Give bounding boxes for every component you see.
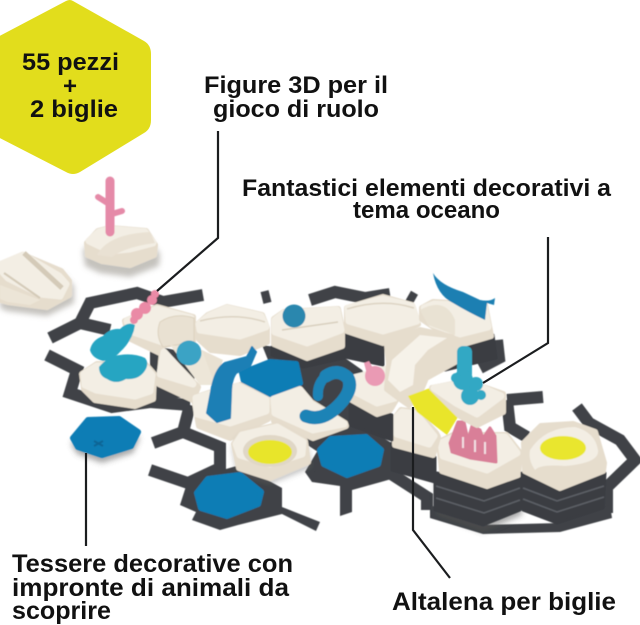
- stacked tile under yellow ramp: [392, 410, 438, 482]
- upper tile stack: centre: [345, 297, 418, 365]
- floating tile with pink coral: [83, 181, 160, 277]
- badge: piece count: +: [63, 73, 77, 100]
- stacked tile with yellow pit: [522, 424, 605, 523]
- heading: 3D figures label line 2: gioco di ruolo: [213, 96, 379, 123]
- tile with yellow circle: [232, 425, 312, 484]
- heading: ocean decorations label: Fantastici elementi decorativi a: [242, 175, 612, 202]
- icon: blue stingray: [433, 273, 495, 320]
- text block: decorative tiles label: scoprire: [12, 597, 111, 625]
- text block: decorative tiles label: Tessere decorative con: [12, 550, 293, 578]
- top middle tile: [198, 307, 267, 353]
- lower tile left: [194, 385, 268, 438]
- decorative tile: lower blue hex: [197, 475, 261, 516]
- icon: teal shell: [90, 324, 147, 382]
- yellow seesaw ramp: [408, 388, 458, 435]
- decorative tile: centre blue hex: [242, 362, 300, 395]
- tile with pink bird: [350, 369, 396, 440]
- heading: marble seesaw label: Altalena per biglie: [392, 588, 616, 616]
- heading: 3D figures label: Figure 3D per il: [204, 72, 388, 99]
- decorative tile: floating blue hex: [71, 419, 140, 463]
- illustration: marble run tiles: [0, 181, 635, 534]
- decorative tile: right blue hex: [320, 437, 381, 475]
- text block: decorative tiles label: impronte di animali da: [12, 574, 290, 602]
- icon: small pink coral: [130, 290, 159, 324]
- icon: blue tentacle one: [207, 347, 256, 422]
- wedge tile with teal ball: [159, 340, 223, 400]
- tile with scoop: [125, 307, 194, 353]
- heading: ocean decorations label line 2: tema oceano: [353, 197, 500, 224]
- lower tile right: [273, 389, 346, 438]
- icon: teal coral: [451, 346, 486, 405]
- upper tile stack: ray tile: [420, 302, 496, 370]
- hexagonal base grid: [47, 292, 635, 534]
- floating tile with ramp: [0, 253, 74, 316]
- icon: pink bird: [364, 361, 385, 386]
- leader line: marble seesaw: [413, 407, 450, 578]
- leader line: ocean decorations: [483, 237, 548, 383]
- icon: blue tentacle two: [306, 372, 350, 418]
- tile with shell: [82, 364, 154, 406]
- tile with teal coral: [432, 384, 503, 425]
- leader line: decorative tiles: [85, 453, 87, 546]
- stacked tile with pink coral: [435, 422, 522, 532]
- leader line: 3D figures: [157, 131, 218, 291]
- tile with blue ball: [272, 304, 344, 367]
- text block: decorative tiles label: [12, 550, 293, 625]
- S-shaped marble ramp: [387, 330, 456, 405]
- badge: piece count: [0, 0, 151, 174]
- badge: piece count: 2 biglie: [30, 96, 118, 123]
- badge: piece count: 55 pezzi: [22, 49, 119, 76]
